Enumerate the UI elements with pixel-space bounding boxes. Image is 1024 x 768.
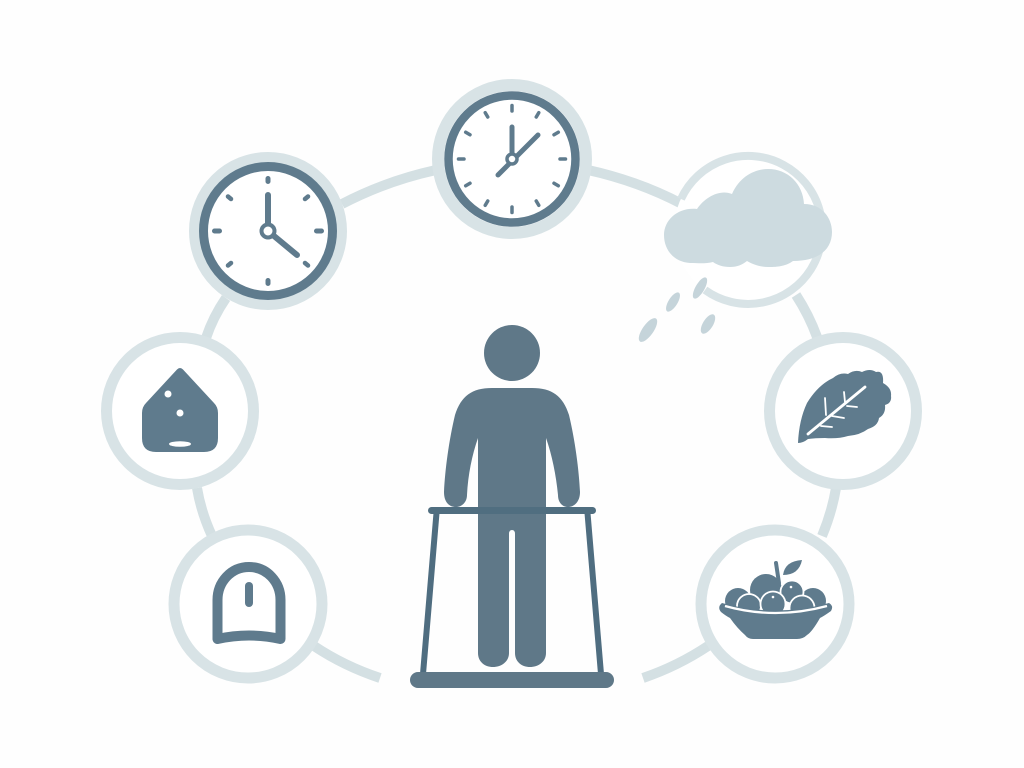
icon: rain cloud: [635, 156, 832, 345]
icon: leaf: [770, 338, 916, 484]
icon: clock at one o'clock: [438, 85, 586, 233]
icon: rounded arch outline: [174, 530, 322, 678]
figure: standing person: [444, 325, 580, 667]
icon: fruit bowl: [701, 530, 849, 678]
body: [444, 388, 580, 667]
icon: house-shaped tag: [106, 338, 254, 484]
head: [484, 325, 540, 381]
figure: walker frame: [410, 507, 614, 688]
connector arc segments: [197, 170, 836, 678]
icon: clock at four o'clock: [195, 158, 341, 304]
